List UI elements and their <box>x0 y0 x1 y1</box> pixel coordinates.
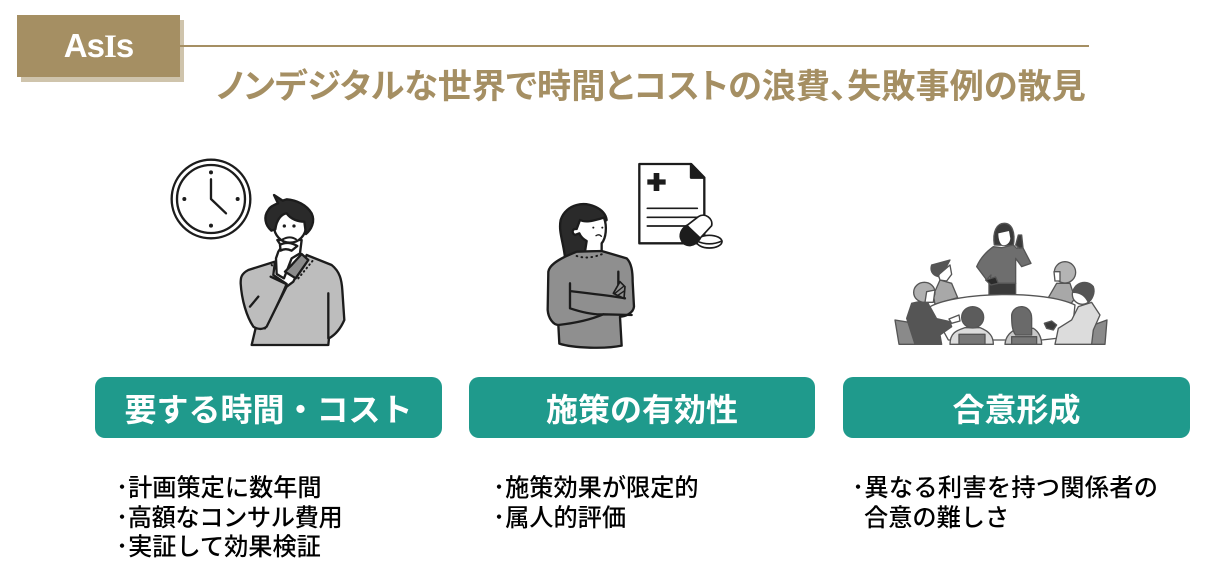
woman figure <box>548 204 634 348</box>
illustration: man thinking with clock <box>172 160 344 345</box>
tag: AsIs: AsIs <box>64 27 133 65</box>
panel: time and cost heading: 要する時間・コスト <box>124 385 412 431</box>
tag: AsIs <box>17 15 180 77</box>
man figure <box>241 195 344 345</box>
table <box>930 295 1075 340</box>
illustration: meeting around a table <box>895 223 1107 344</box>
text block: effectiveness items: ･施策効果が限定的 <box>493 468 699 503</box>
icon: clock <box>172 160 250 238</box>
text block: time and cost items <box>116 468 342 562</box>
panel: consensus heading <box>843 377 1190 438</box>
text block: effectiveness items <box>493 468 699 532</box>
seated participants, front right <box>1044 282 1107 344</box>
header rule <box>180 45 1089 47</box>
text block: consensus items: 合意の難しさ <box>864 498 1009 532</box>
illustration: woman with prescription <box>548 164 722 348</box>
presenter <box>977 223 1031 295</box>
text block: time and cost items: ･実証して効果検証 <box>116 527 321 562</box>
seated participants, front left <box>895 282 1042 344</box>
text block: consensus items <box>852 468 1158 532</box>
text block: effectiveness items: ･属人的評価 <box>493 498 626 532</box>
text block: time and cost items: ･計画策定に数年間 <box>116 468 322 503</box>
panel: consensus heading: 合意形成 <box>952 385 1080 431</box>
panel: effectiveness heading <box>469 377 815 438</box>
title: ノンデジタルな世界で時間とコストの浪費、失敗事例の散見 <box>216 58 1086 108</box>
text block: consensus items: ･異なる利害を持つ関係者の <box>852 468 1158 503</box>
icon: medical document and pills <box>639 164 722 248</box>
seated participants, back row <box>931 260 1076 305</box>
panel: time and cost heading <box>95 377 442 438</box>
text block: time and cost items: ･高額なコンサル費用 <box>116 498 342 532</box>
panel: effectiveness heading: 施策の有効性 <box>546 385 738 431</box>
